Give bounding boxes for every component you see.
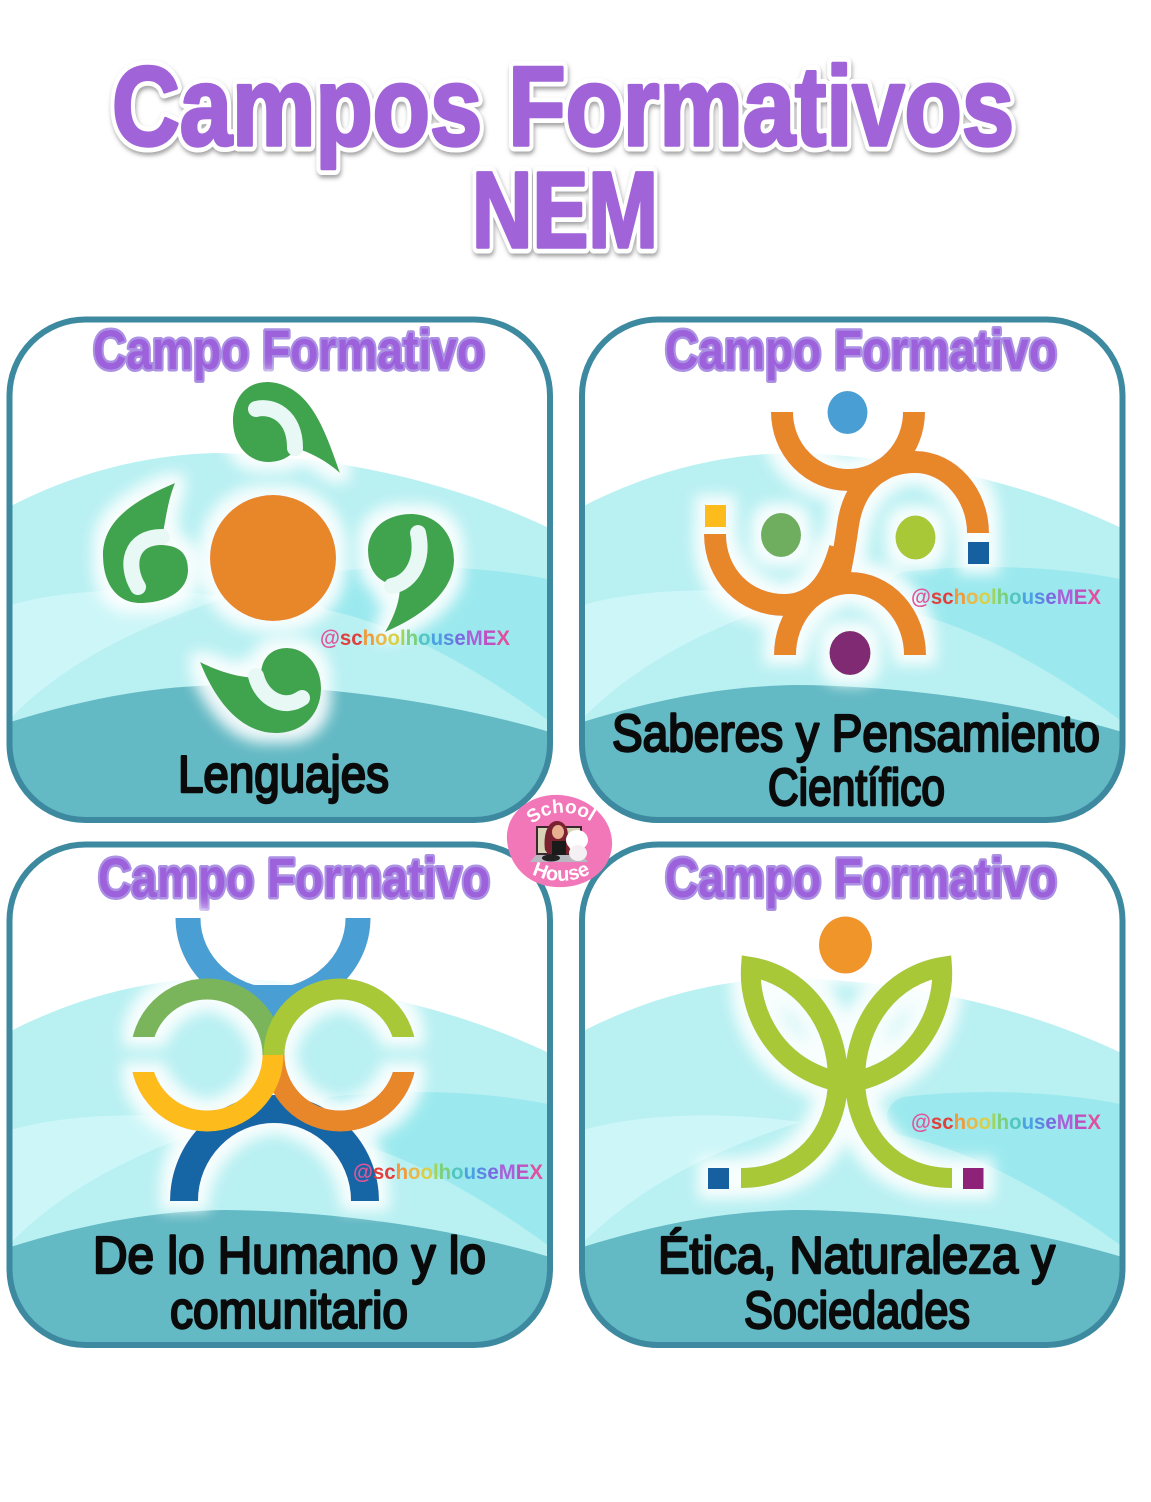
icon: green leaves figure <box>708 916 984 1189</box>
label: De lo Humano y lo comunitario: De lo Humano y lo <box>93 1227 486 1285</box>
label: Lenguajes: Lenguajes <box>178 746 389 804</box>
title <box>112 44 1014 270</box>
panel: Lenguajes <box>7 317 553 830</box>
watermark: @schoolhouseMEX <box>320 627 510 650</box>
logo: School House badge: School <box>526 799 596 822</box>
icon: orange arcs with circles and squares <box>705 391 989 675</box>
panel: Ética, Naturaleza y Sociedades <box>580 842 1126 1355</box>
icon: interlocking coloured rings <box>141 918 406 1201</box>
title: NEM <box>472 149 658 270</box>
label: De lo Humano y lo comunitario <box>93 1227 486 1340</box>
title: NEM <box>472 149 658 270</box>
label: Saberes y Pensamiento Científico <box>612 705 1100 817</box>
watermark: @schoolhouseMEX <box>911 1111 1101 1134</box>
label: De lo Humano y lo comunitario: comunitario <box>170 1282 408 1340</box>
watermark: @schoolhouseMEX <box>911 586 1101 609</box>
heading: Campo Formativo: Campo Formativo <box>665 846 1057 909</box>
label: Ética, Naturaleza y Sociedades: Sociedades <box>744 1282 970 1340</box>
icon: orange circle with four green commas <box>103 382 454 733</box>
panel: De lo Humano y lo comunitario <box>7 842 553 1355</box>
logo: School House badge: House <box>532 862 589 881</box>
watermark: @schoolhouseMEX <box>353 1161 543 1184</box>
heading: Campo Formativo: Campo Formativo <box>665 318 1057 381</box>
label: Saberes y Pensamiento Científico: Saberes y Pensamiento <box>612 705 1100 763</box>
logo: School House badge <box>506 794 612 888</box>
heading: Campo Formativo: Campo Formativo <box>93 318 485 381</box>
panel: Saberes y Pensamiento Científico <box>580 317 1126 830</box>
label: Ética, Naturaleza y Sociedades: Ética, Naturaleza y <box>658 1227 1055 1285</box>
label: Saberes y Pensamiento Científico: Científico <box>768 759 945 817</box>
heading: Campo Formativo: Campo Formativo <box>98 846 490 909</box>
label: Ética, Naturaleza y Sociedades <box>658 1227 1055 1340</box>
